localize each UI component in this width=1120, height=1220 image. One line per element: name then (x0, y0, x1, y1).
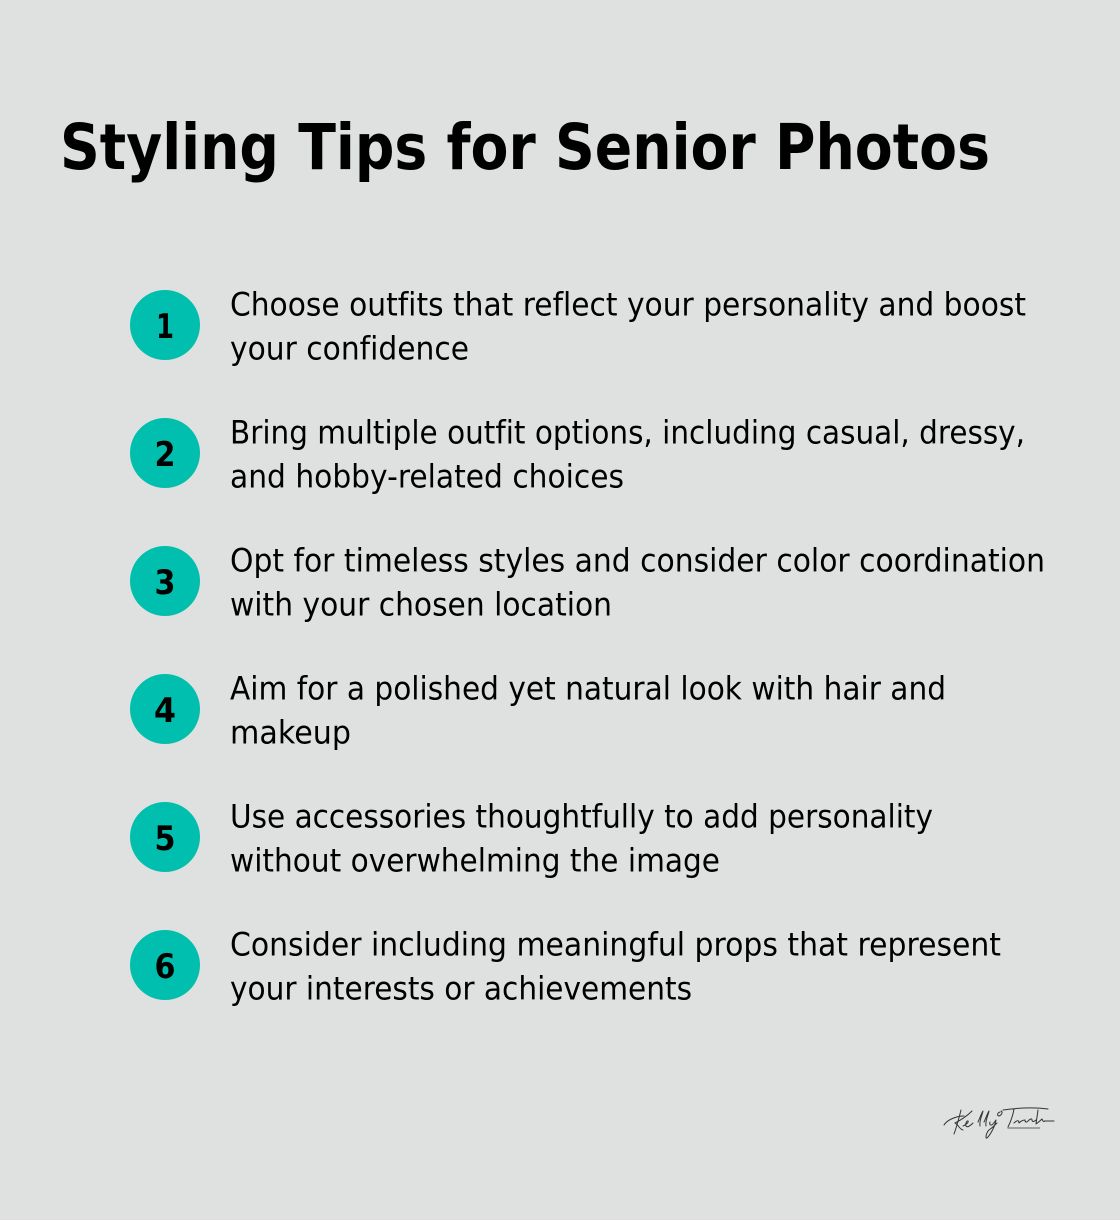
number badge 2: 2 (154, 435, 176, 475)
list item 6 (130, 926, 1001, 1008)
text: item 6 (230, 926, 1001, 1008)
text: item 3 (230, 542, 1045, 624)
text: item 4: makeup (230, 714, 351, 752)
text: item 4: Aim for a polished yet natural look with hair and (230, 670, 946, 708)
number badge 3 (130, 546, 200, 616)
number badge 6: 6 (154, 947, 176, 987)
text: item 6: Consider including meaningful props that represent (230, 926, 1001, 964)
title: Styling Tips for Senior Photos (60, 111, 990, 184)
text: item 4 (230, 670, 946, 752)
text: item 5: without overwhelming the image (230, 842, 720, 880)
number badge 4 (130, 674, 200, 744)
text: item 1 (230, 286, 1026, 368)
number badge 3: 3 (154, 563, 176, 603)
text: item 2 (230, 414, 1025, 496)
number badge 4: 4 (154, 691, 176, 731)
text: item 3: with your chosen location (230, 586, 612, 624)
number badge 1 (130, 290, 200, 360)
list item 4 (130, 670, 946, 752)
list item 5 (130, 798, 933, 880)
list item 3 (130, 542, 1045, 624)
number badge 5: 5 (154, 819, 176, 859)
text: item 6: your interests or achievements (230, 970, 692, 1008)
number badge 6 (130, 930, 200, 1000)
text: item 3: Opt for timeless styles and consider color coordination (230, 542, 1045, 580)
number badge 5 (130, 802, 200, 872)
list item 1 (130, 286, 1026, 368)
text: item 5: Use accessories thoughtfully to add personality (230, 798, 933, 836)
list item 2 (130, 414, 1025, 496)
text: item 1: your confidence (230, 330, 469, 368)
text: item 2: and hobby-related choices (230, 458, 624, 496)
text: item 5 (230, 798, 933, 880)
text: item 2: Bring multiple outfit options, including casual, dressy, (230, 414, 1025, 452)
number badge 1: 1 (156, 307, 174, 347)
number badge 2 (130, 418, 200, 488)
logo: Kelly & Tarski signature (944, 1108, 1054, 1138)
text: item 1: Choose outfits that reflect your personality and boost (230, 286, 1026, 324)
